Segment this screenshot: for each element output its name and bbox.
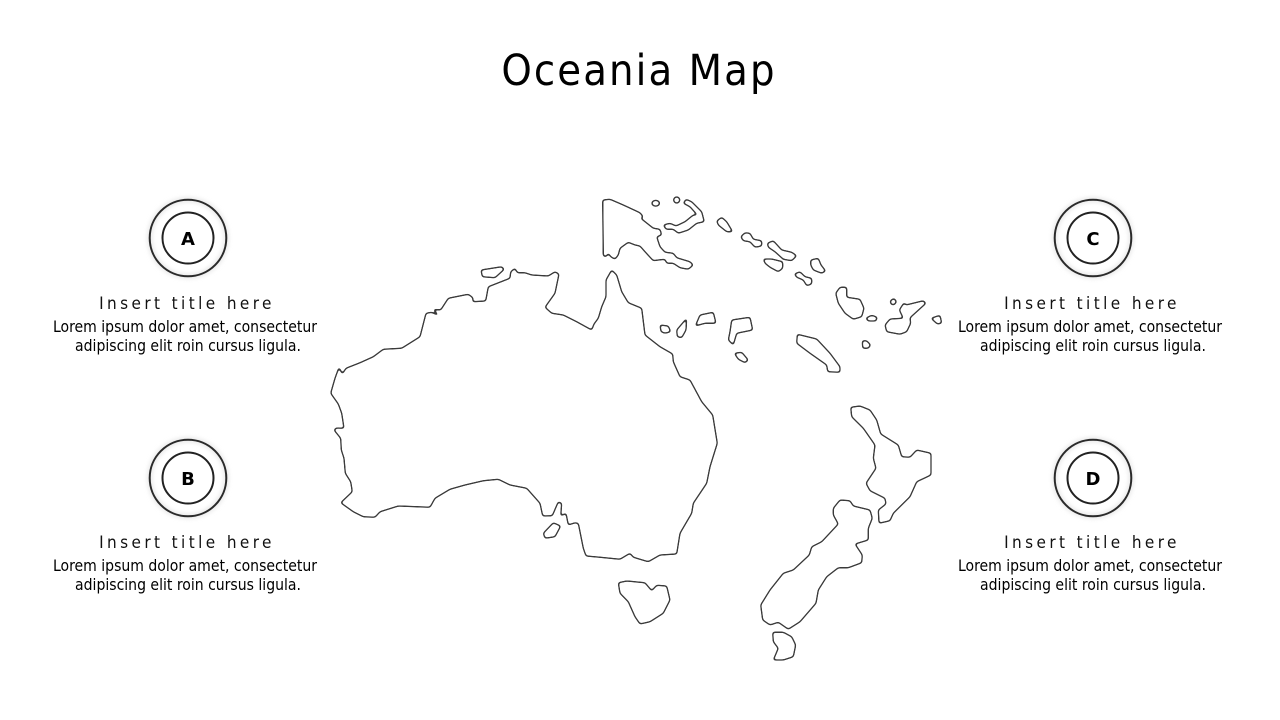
- icon: badge B: [146, 436, 230, 520]
- text block A: [53, 318, 318, 355]
- text block A: adipiscing elit roin cursus ligula.: [75, 337, 301, 355]
- icon: badge B: B: [181, 469, 194, 490]
- icon: badge A: A: [181, 229, 195, 250]
- small islands north of New Guinea: [652, 197, 680, 206]
- text block B: Lorem ipsum dolor amet, consectetur: [53, 557, 317, 575]
- New Zealand South Island: [761, 500, 872, 629]
- Kangaroo Island: [543, 523, 561, 538]
- icon: badge C: C: [1086, 229, 1099, 250]
- text block A: Lorem ipsum dolor amet, consectetur: [53, 318, 317, 336]
- heading B: Insert title here: [99, 533, 275, 553]
- text block B: adipiscing elit roin cursus ligula.: [75, 576, 301, 594]
- all landmasses: [331, 197, 942, 660]
- icon: badge C: [1052, 196, 1134, 280]
- New Britain: [663, 199, 704, 233]
- text block C: Lorem ipsum dolor amet, consectetur: [958, 318, 1222, 336]
- text block B: [53, 557, 318, 594]
- panel: item C: [958, 196, 1222, 355]
- icon: badge A: [146, 196, 230, 280]
- heading C: Insert title here: [1004, 294, 1180, 314]
- icon: badge D: D: [1085, 469, 1100, 490]
- text block D: adipiscing elit roin cursus ligula.: [980, 576, 1206, 594]
- Australia: [331, 268, 717, 562]
- panel: item D: [958, 436, 1222, 594]
- panel: item B: [53, 436, 318, 594]
- panel: item A: [53, 196, 318, 355]
- heading A: Insert title here: [99, 294, 275, 314]
- text block C: adipiscing elit roin cursus ligula.: [980, 337, 1206, 355]
- Papua New Guinea: [603, 199, 693, 269]
- text block C: [958, 318, 1222, 355]
- heading D: Insert title here: [1004, 533, 1180, 553]
- Melville Island: [481, 267, 504, 278]
- Coral Sea islands: [660, 312, 753, 363]
- Stewart Island: [773, 632, 796, 660]
- icon: badge D: [1052, 436, 1134, 520]
- Vanuatu and Fiji islands: [836, 287, 942, 348]
- text block D: [958, 557, 1222, 594]
- Solomon Islands chain: [717, 217, 826, 286]
- New Caledonia: [797, 334, 840, 372]
- Tasmania: [618, 581, 670, 624]
- New Zealand North Island: [851, 406, 931, 523]
- title: Oceania Map: [501, 46, 777, 96]
- text block D: Lorem ipsum dolor amet, consectetur: [958, 557, 1222, 575]
